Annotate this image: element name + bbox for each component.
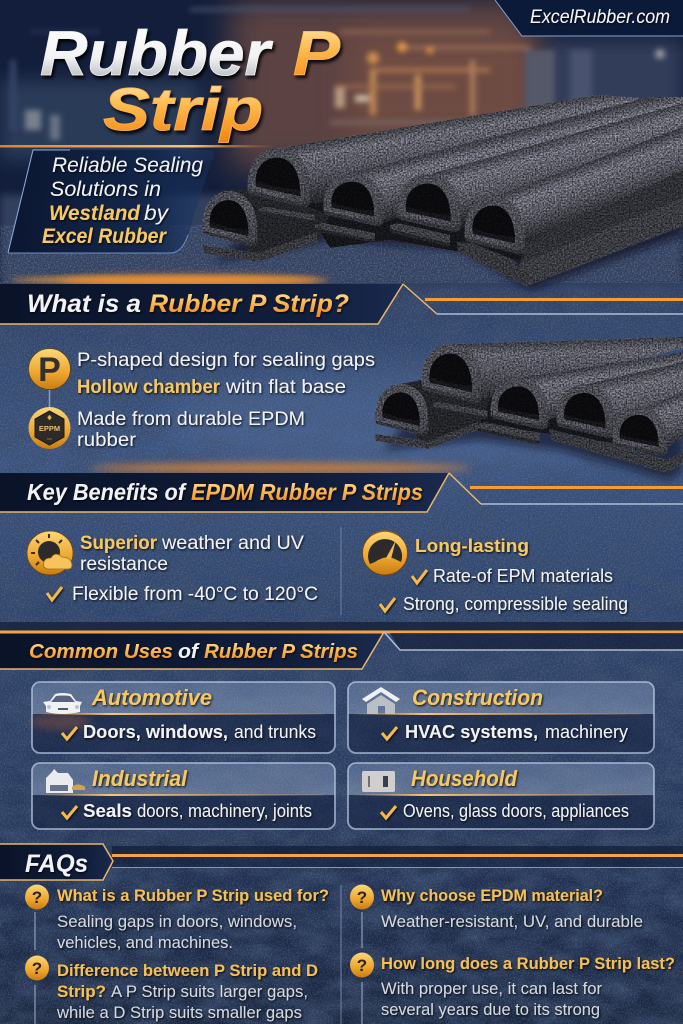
FAQ 1: Sealing gaps in doors, windows, — [57, 913, 297, 931]
benefit: weather resistance — [27, 531, 318, 605]
card: Industrial: doors, machinery, joints — [137, 800, 312, 821]
text: weather benefit: weather and UV — [161, 533, 304, 554]
orange glow above Key Benefits header — [90, 463, 470, 473]
text: weather benefit: Flexible from -40°C to 120°C — [72, 584, 318, 605]
card: Construction — [348, 682, 654, 753]
hero backdrop: blurred factory — [0, 0, 683, 287]
card: Automotive: Doors, windows, — [83, 721, 228, 742]
website tag: ExcelRubber.com — [530, 7, 670, 28]
orange rule under title — [0, 145, 275, 148]
tagline panel — [8, 150, 215, 253]
FAQ 2: A P Strip suits larger gaps, — [111, 983, 308, 1001]
text: weather benefit — [47, 533, 318, 605]
FAQ 4: several years due to its strong — [381, 1001, 600, 1019]
rubber strips, second view — [375, 337, 683, 473]
icon: question badge: ? — [357, 888, 367, 907]
shadow under hero strips — [215, 190, 683, 290]
FAQ 1: vehicles, and machines. — [57, 934, 233, 952]
FAQ 1: What is a Rubber P Strip used for? — [57, 887, 329, 905]
icon: EPDM hexagon badge: EPPM — [39, 424, 60, 433]
icon: question badge — [25, 884, 49, 910]
FAQ 4: How long does a Rubber P Strip last? — [381, 955, 675, 973]
icon: sun and cloud — [27, 531, 73, 575]
icon: car — [43, 693, 82, 714]
text: P-strip description — [77, 349, 375, 451]
shadow under second strips — [385, 400, 683, 480]
section header: FAQs: FAQs — [25, 850, 88, 878]
FAQ 2 — [25, 956, 318, 1024]
icon: oven — [362, 771, 395, 792]
section header: Common Uses: Common Uses — [29, 640, 173, 663]
card: Automotive: Automotive — [91, 685, 212, 710]
What-is content — [28, 348, 375, 451]
card: Industrial: Industrial — [92, 766, 188, 791]
text: long-lasting benefit — [380, 535, 628, 614]
FAQ 2: while a D Strip suits smaller gaps — [56, 1004, 302, 1022]
card: Construction: machinery — [545, 721, 629, 742]
icon: house — [362, 687, 400, 714]
section header: FAQs — [0, 844, 683, 880]
title: Rubber — [40, 19, 274, 89]
card: Automotive — [30, 682, 335, 753]
text: P-strip description: rubber — [77, 429, 137, 451]
section header: What is a Rubber P Strip?: What is a — [27, 290, 141, 318]
FAQ 2: Strip? — [57, 983, 106, 1001]
icon: P badge: P — [38, 351, 61, 389]
title — [40, 19, 341, 143]
text: long-lasting benefit: Long-lasting — [415, 535, 529, 556]
section header: Key Benefits: Key Benefits of — [27, 479, 187, 505]
FAQ 3: Why choose EPDM material? — [381, 887, 603, 905]
orange glow over What-is header — [10, 276, 330, 284]
benefit: long-lasting — [362, 531, 628, 614]
card: Industrial — [32, 763, 335, 829]
section header: Common Uses: of — [178, 640, 200, 663]
section header: What is a Rubber P Strip?: Rubber P Strip? — [149, 290, 349, 318]
text: weather benefit: resistance — [80, 554, 168, 575]
tagline panel: by — [144, 202, 170, 225]
card: Construction: Construction — [412, 685, 543, 710]
icon: question badge — [350, 884, 374, 910]
icon: question badge — [25, 956, 49, 980]
icon: question badge — [350, 952, 374, 978]
section header: Common Uses — [0, 622, 683, 669]
FAQ 1 — [25, 884, 329, 952]
FAQ 4: With proper use, it can last for — [381, 980, 602, 998]
FAQ 2: Difference between P Strip and D — [57, 962, 318, 980]
section header: Common Uses: Rubber P Strips — [204, 640, 358, 663]
tagline panel: Excel Rubber — [42, 225, 168, 248]
card: Construction: HVAC systems, — [405, 721, 538, 742]
tagline panel: Westland — [49, 202, 141, 225]
FAQ 3: Weather-resistant, UV, and durable — [381, 913, 643, 931]
card: Automotive: and trunks — [234, 721, 316, 742]
text: P-strip description: Hollow chamber — [77, 376, 220, 398]
icon: question badge: ? — [357, 956, 367, 975]
text: long-lasting benefit: Strong, compressible sealing — [403, 593, 628, 614]
card: Household — [348, 763, 654, 829]
card: Household: Ovens, glass doors, appliances — [403, 800, 629, 821]
icon: factory — [46, 769, 85, 793]
website tag — [495, 0, 683, 36]
icon: gauge — [362, 531, 408, 575]
text: P-strip description: P-shaped design for sealing gaps — [77, 349, 375, 371]
tagline panel: Solutions in — [50, 178, 161, 201]
hero rubber strips — [202, 95, 683, 286]
icon: EPDM hexagon badge — [28, 407, 70, 449]
icon: question badge: ? — [32, 888, 42, 907]
card: Household: Household — [411, 766, 518, 791]
text: P-strip description: witn flat base — [225, 376, 346, 398]
title: P — [293, 19, 341, 89]
FAQ 4 — [350, 952, 675, 1024]
text: long-lasting benefit: Rate-of EPM materials — [433, 565, 613, 586]
text: P-strip description: Made from durable EPDM — [77, 408, 305, 430]
FAQ 3 — [350, 884, 643, 948]
icon: question badge: ? — [32, 959, 42, 978]
section header: Key Benefits: EPDM Rubber P Strips — [191, 479, 423, 505]
title: Strip — [103, 76, 263, 143]
tagline panel: Reliable Sealing — [52, 154, 203, 177]
section header: What is a Rubber P Strip? — [0, 284, 683, 324]
text: weather benefit: Superior — [80, 533, 158, 554]
icon: P badge — [28, 348, 70, 390]
section header: Key Benefits — [0, 473, 683, 512]
card: Industrial: Seals — [83, 800, 132, 821]
